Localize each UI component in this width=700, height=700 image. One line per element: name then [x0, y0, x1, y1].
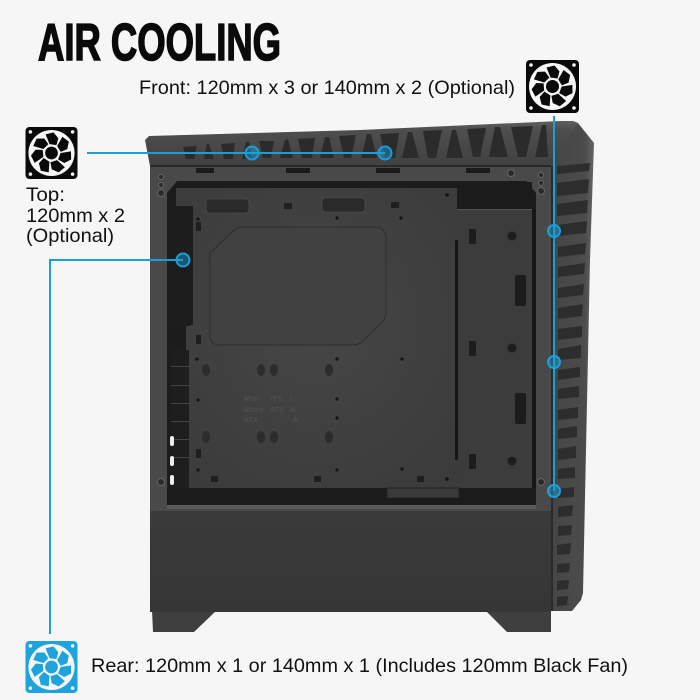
- board size labels: ITX: [270, 396, 282, 403]
- board size labels: ATX: [270, 407, 285, 414]
- board size labels: I: [290, 396, 292, 403]
- front fascia: [548, 121, 594, 611]
- title: AIR COOLING: [38, 14, 281, 72]
- frame screws: [158, 170, 544, 486]
- rear exhaust fan: [167, 206, 193, 325]
- top label: Top:: [26, 184, 65, 206]
- base shroud: [150, 511, 551, 612]
- front connector line: [548, 116, 560, 497]
- drive cage: [455, 182, 536, 489]
- interior opening: [167, 181, 536, 505]
- top fan icon: [26, 127, 78, 179]
- board size labels: M: [290, 407, 296, 414]
- PC case illustration: [145, 121, 594, 632]
- top label: 120mm x 2: [26, 205, 125, 227]
- board size labels: Mini: [244, 396, 259, 403]
- rear fan icon: [26, 641, 78, 693]
- tray grommets: [206, 198, 365, 213]
- board size labels: ATX: [244, 417, 259, 424]
- top connector line: [87, 146, 392, 160]
- front label: Front: 120mm x 3 or 140mm x 2 (Optional): [139, 77, 515, 99]
- motherboard standoff holes: [202, 364, 333, 443]
- psu bracket: [387, 488, 459, 498]
- top panel vents: [183, 125, 548, 159]
- top label: (Optional): [26, 225, 114, 247]
- rear label: Rear: 120mm x 1 or 140mm x 1 (Includes 120mm Black Fan): [91, 655, 628, 677]
- expansion slots: [170, 350, 189, 490]
- motherboard tray: [176, 188, 457, 488]
- front fan icon: [526, 60, 579, 113]
- case floor: [167, 488, 536, 505]
- board size labels: [244, 396, 298, 424]
- top panel: [145, 121, 578, 166]
- rear connector line: [50, 254, 190, 634]
- case feet: [152, 610, 551, 632]
- top label: [26, 184, 125, 247]
- tray cutout: [210, 227, 386, 345]
- board size labels: Micro: [244, 407, 264, 414]
- front fascia vents: [557, 163, 590, 606]
- board size labels: A: [293, 417, 298, 424]
- side frame: [150, 165, 551, 511]
